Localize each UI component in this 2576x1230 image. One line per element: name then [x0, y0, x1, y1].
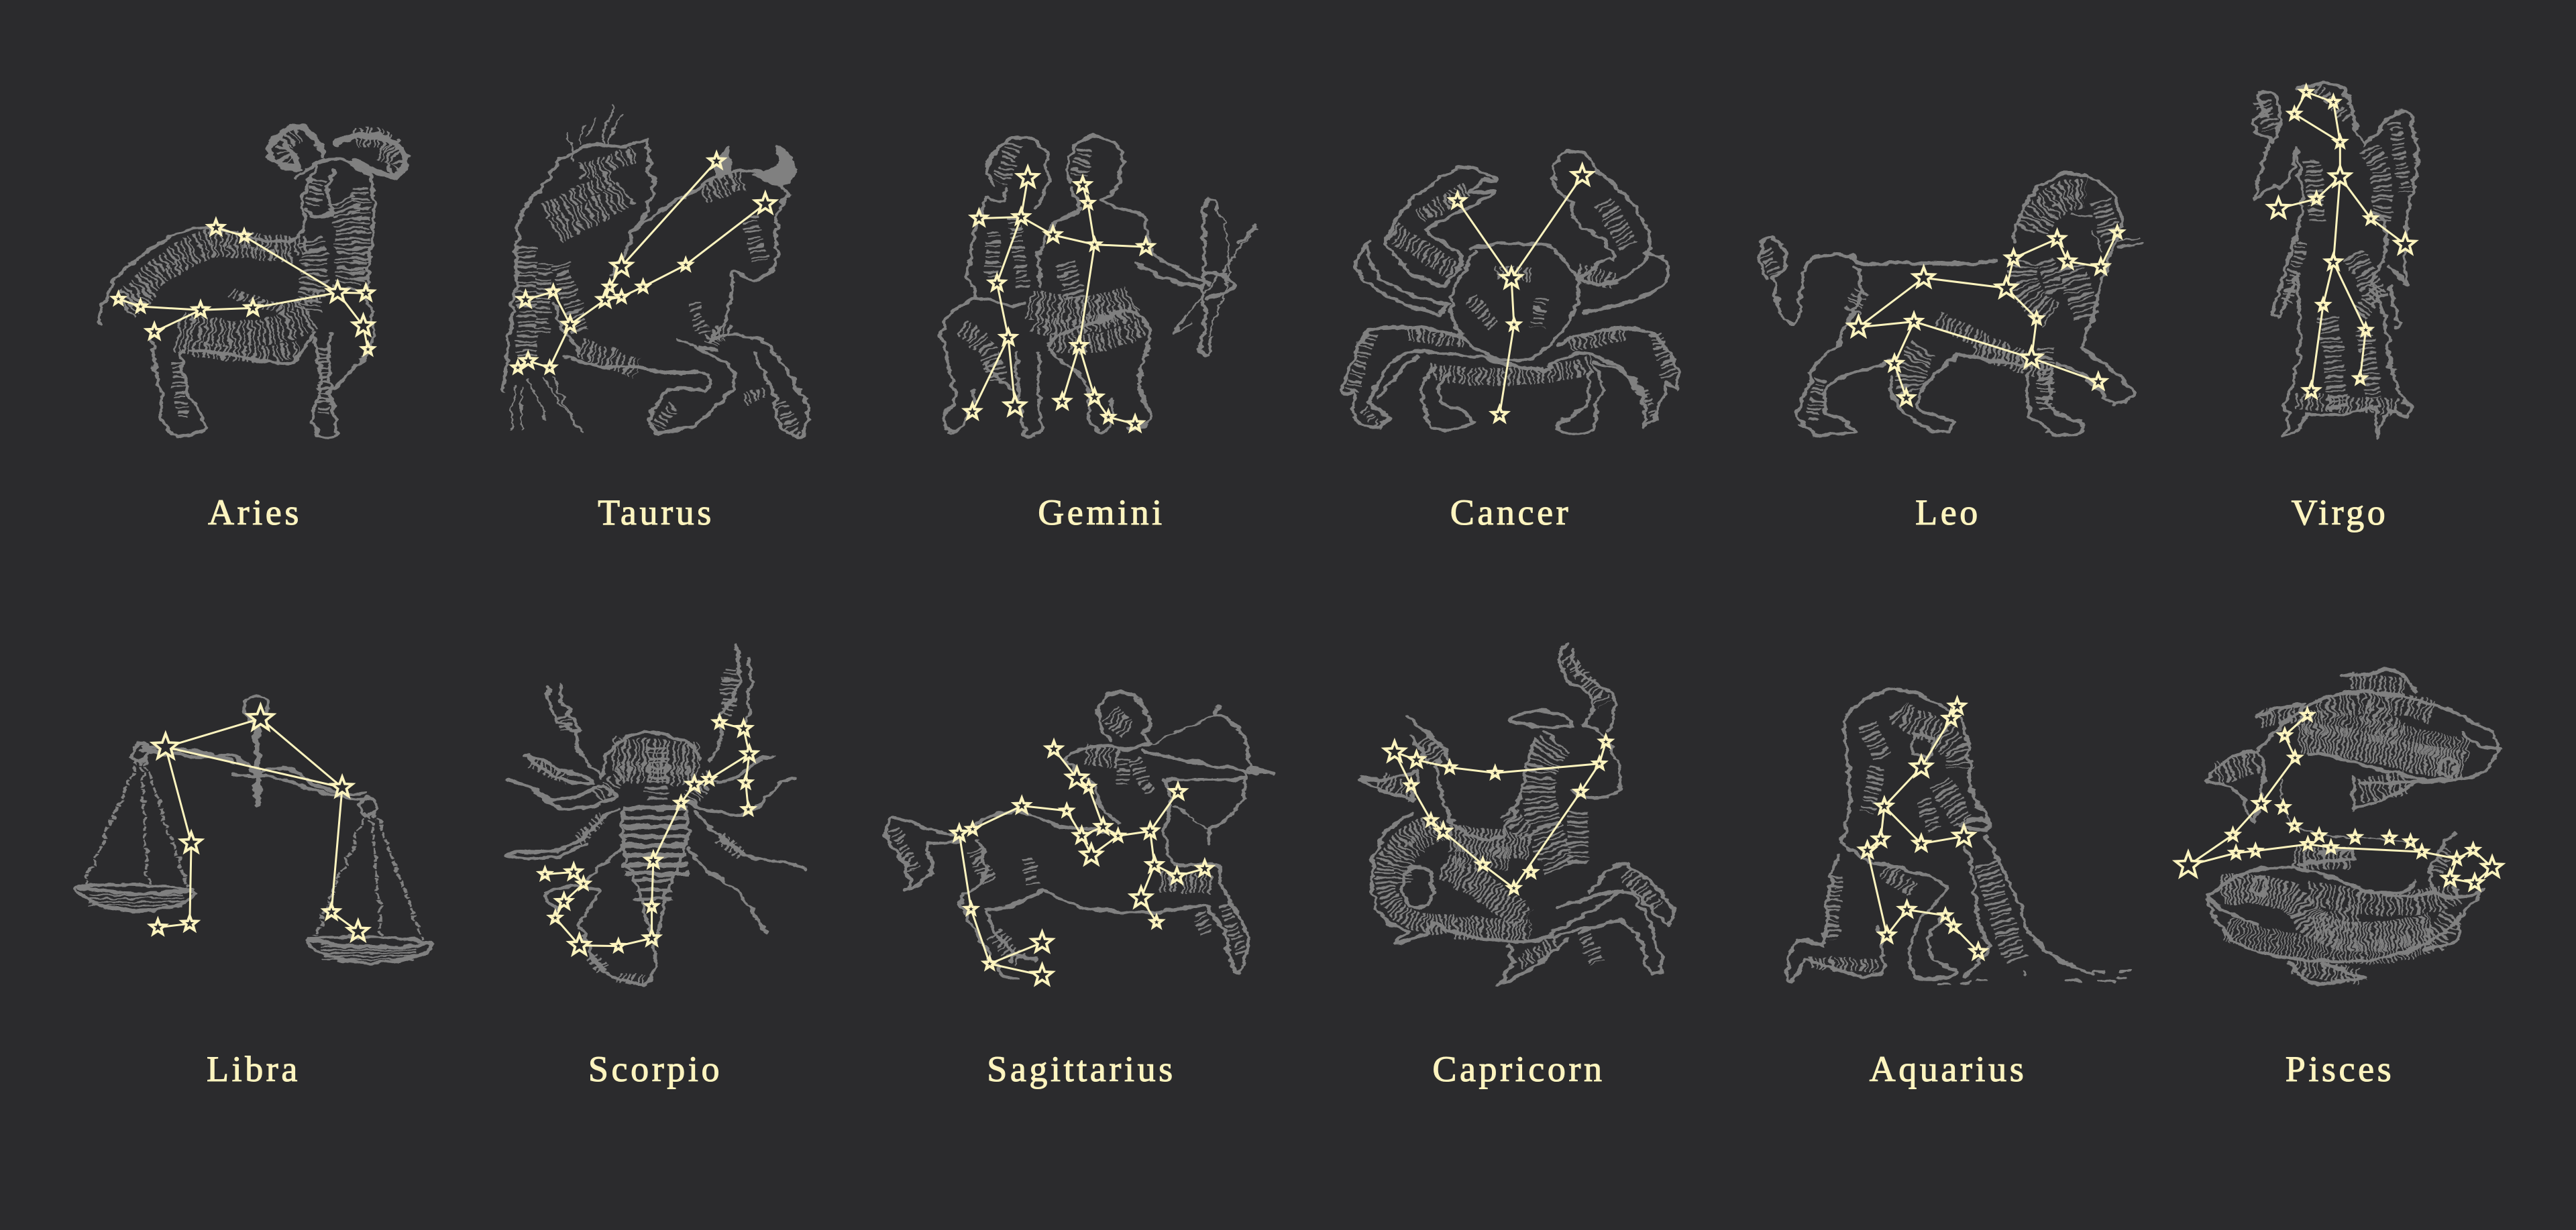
illustration: maiden — [2253, 84, 2418, 437]
label: Taurus: Taurus — [598, 492, 714, 533]
constellation: Pisces — [2176, 709, 2502, 889]
panel: Pisces — [2176, 669, 2502, 1089]
constellation: Cancer — [1450, 165, 1593, 421]
panel: Libra — [76, 696, 433, 1089]
panel: Gemini — [942, 135, 1254, 533]
label: Pisces: Pisces — [2286, 1049, 2394, 1089]
constellation: Gemini — [965, 167, 1154, 431]
label: Leo: Leo — [1915, 492, 1981, 533]
label: Aquarius: Aquarius — [1870, 1049, 2027, 1089]
constellation: Aries — [113, 220, 374, 354]
constellation: Taurus — [512, 153, 775, 372]
panel: Sagittarius — [886, 693, 1273, 1089]
label: Sagittarius: Sagittarius — [987, 1049, 1176, 1089]
illustration: centaur archer — [886, 693, 1273, 980]
constellation: Scorpio — [539, 716, 757, 954]
label: Scorpio: Scorpio — [588, 1049, 722, 1089]
faint connecting stars — [2277, 801, 2416, 846]
label: Libra: Libra — [207, 1049, 301, 1089]
illustration: crab — [1342, 150, 1678, 435]
constellation: Leo — [1848, 227, 2123, 404]
illustration: sea goat — [1361, 643, 1674, 985]
illustration: water bearer — [1787, 689, 2129, 984]
illustration: bull — [504, 107, 808, 438]
panel: Capricorn — [1361, 643, 1674, 1089]
constellation: Capricorn — [1385, 736, 1611, 893]
label: Cancer: Cancer — [1450, 492, 1571, 533]
label: Gemini: Gemini — [1038, 492, 1165, 533]
illustration: ram — [99, 127, 405, 437]
illustration: scales — [76, 696, 433, 963]
panel: Leo — [1760, 173, 2141, 533]
illustration: two fish — [2209, 669, 2499, 985]
label: Virgo: Virgo — [2292, 492, 2388, 533]
illustration: twins — [942, 135, 1254, 436]
label: Capricorn: Capricorn — [1432, 1049, 1605, 1089]
illustration: scorpion — [506, 646, 806, 985]
panel: Cancer — [1342, 150, 1678, 533]
panel: Virgo — [2253, 84, 2418, 533]
constellation: Virgo — [2268, 86, 2416, 398]
panel: Aries — [99, 127, 405, 533]
constellation: Aquarius — [1860, 698, 1986, 958]
constellation: Sagittarius — [952, 741, 1212, 984]
panel: Scorpio — [506, 646, 806, 1089]
panel: Aquarius — [1787, 689, 2129, 1089]
panel: Taurus — [504, 107, 808, 533]
label: Aries: Aries — [208, 492, 302, 533]
constellation: Libra — [150, 705, 368, 940]
illustration: lion — [1760, 173, 2141, 436]
